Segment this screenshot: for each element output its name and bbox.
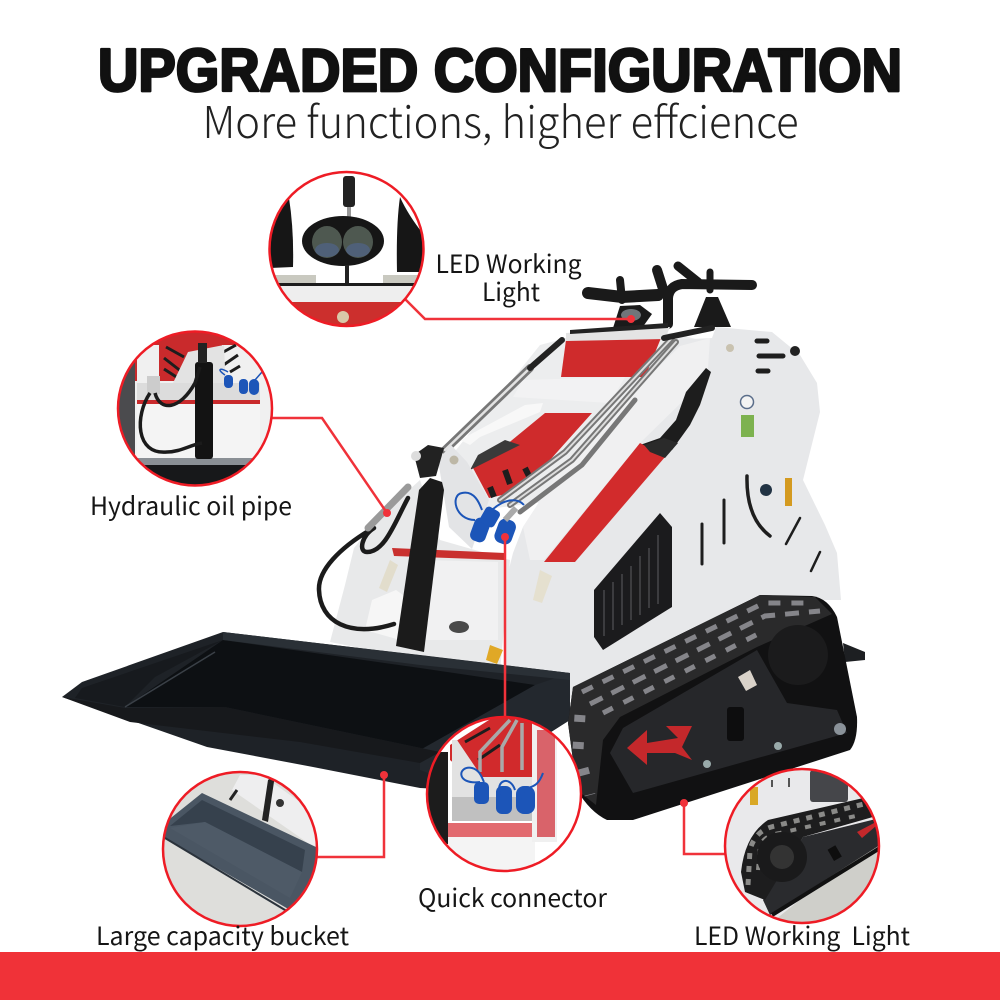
rubber track — [568, 595, 857, 820]
track wheel — [768, 625, 828, 685]
bucket leader line — [317, 775, 384, 857]
quick connector leader line — [504, 537, 506, 717]
black track side panel — [610, 650, 847, 793]
label: LED Working Light: Light — [482, 273, 541, 309]
label: Large capacity bucket: Large capacity bucket — [96, 917, 350, 953]
lift cylinder — [396, 478, 444, 652]
circle: LED working light close-up — [268, 172, 424, 327]
rear black wheel well — [640, 368, 711, 450]
label: LED Working Light: LED Working — [436, 245, 582, 281]
label: LED Working Light — [436, 245, 582, 309]
LED light leader line — [405, 299, 631, 319]
lift arm plate — [438, 445, 489, 549]
side vent grille — [594, 513, 672, 650]
red arrow decal — [627, 726, 692, 765]
title: UPGRADED CONFIGURATION — [98, 37, 902, 104]
red side stripe — [544, 443, 665, 562]
track leader line — [684, 803, 725, 854]
LED light housing and seat back — [613, 305, 652, 328]
skid steer loader machine — [62, 266, 865, 820]
tread band — [568, 595, 832, 805]
LED work light lens — [621, 309, 641, 321]
subtitle: More functions, higher effcience — [202, 87, 798, 151]
control handles — [588, 266, 752, 324]
blue quick couplers — [456, 493, 524, 546]
leader dots — [380, 315, 688, 807]
rear step — [843, 643, 865, 662]
label: Hydraulic oil pipe: Hydraulic oil pipe — [90, 487, 292, 523]
main side plate — [503, 327, 841, 700]
circle: track close-up — [724, 768, 880, 924]
bucket — [62, 632, 570, 790]
circle: large capacity bucket close-up — [162, 771, 318, 927]
callout lines and dots — [272, 299, 725, 857]
rubber hoses — [319, 487, 408, 629]
circle: hydraulic oil pipe close-up — [117, 331, 273, 487]
upper frame — [440, 333, 700, 510]
side plate slots and decals — [702, 341, 820, 571]
label: Quick connector: Quick connector — [418, 879, 607, 915]
label: LED Working Light bottom right: LED Working Light — [694, 917, 911, 953]
front white chassis — [330, 480, 510, 672]
hydraulic leader line — [272, 418, 387, 513]
red footer bar — [0, 952, 1000, 1000]
steel hydraulic lines — [445, 328, 712, 512]
circle: quick connector close-up — [426, 716, 582, 872]
